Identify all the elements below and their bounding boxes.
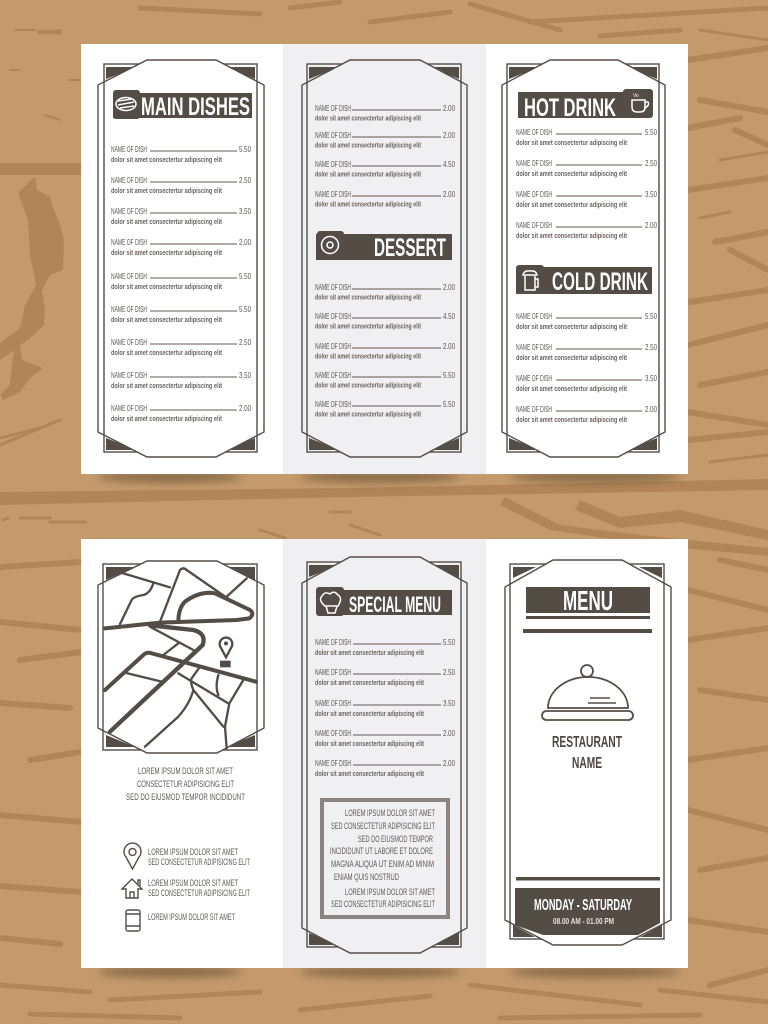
panel: bottom brochure sheet xyxy=(81,539,688,968)
menu items: special menu: NAME OF DISH xyxy=(315,698,351,708)
menu items: top of dessert panel: 2.00 xyxy=(443,189,455,199)
menu items: dessert: NAME OF DISH xyxy=(315,282,351,292)
menu items: cold drink: NAME OF DISH xyxy=(516,311,552,321)
address text: SED DO EIUSMOD TEMPOR INCIDIDUNT xyxy=(126,792,245,802)
menu items: special menu: dolor sit amet consectertur adipiscing elit xyxy=(315,709,424,718)
menu items: main dishes: NAME OF DISH xyxy=(111,144,147,154)
frame: special menu xyxy=(302,557,467,953)
menu items: dessert: dolor sit amet consectertur adipiscing elit xyxy=(315,322,421,330)
menu items: main dishes: dolor sit amet consectertur adipiscing elit xyxy=(111,282,222,291)
icon: steak xyxy=(116,98,136,110)
menu items: main dishes: dolor sit amet consectertur adipiscing elit xyxy=(111,315,222,324)
menu items: special menu: 2.00 xyxy=(443,758,455,768)
menu items: main dishes: dolor sit amet consectertur adipiscing elit xyxy=(111,155,222,164)
icon: location pin xyxy=(124,843,141,869)
menu items: main dishes: 5.50 xyxy=(239,304,251,314)
menu items: dessert: dolor sit amet consectertur adipiscing elit xyxy=(315,380,421,390)
frame: main dishes xyxy=(98,60,264,457)
text box: SED CONSECTETUR ADIPISICING ELIT xyxy=(331,899,435,909)
menu items: hot drink: NAME OF DISH xyxy=(516,220,552,230)
menu items: cold drink: dolor sit amet consectertur adipiscing elit xyxy=(516,384,627,393)
menu items: cold drink: 2.00 xyxy=(645,404,657,414)
menu items: main dishes: NAME OF DISH xyxy=(111,237,147,247)
menu items: dessert: NAME OF DISH xyxy=(315,370,351,380)
menu items: hot drink: dolor sit amet consectertur adipiscing elit xyxy=(516,231,627,240)
icon: phone xyxy=(126,910,140,931)
panel: top brochure sheet xyxy=(81,44,688,474)
menu items: special menu: NAME OF DISH xyxy=(315,758,351,768)
heading: cold drink xyxy=(516,265,652,296)
menu items: cold drink: 5.50 xyxy=(645,311,657,321)
menu items: top of dessert panel: NAME OF DISH xyxy=(315,130,351,140)
opening hours xyxy=(515,888,660,935)
menu items: main dishes: dolor sit amet consectertur adipiscing elit xyxy=(111,217,222,226)
menu items: main dishes: 3.50 xyxy=(239,370,251,380)
menu items: hot drink: dolor sit amet consectertur adipiscing elit xyxy=(516,169,627,178)
menu items: main dishes: dolor sit amet consectertur adipiscing elit xyxy=(111,414,222,423)
menu items: main dishes: NAME OF DISH xyxy=(111,304,147,314)
menu items: special menu: dolor sit amet consectertur adipiscing elit xyxy=(315,739,424,748)
icon: chef hat xyxy=(321,592,340,613)
contact: home: LOREM IPSUM DOLOR SIT AMET xyxy=(148,878,238,888)
menu items: dessert: 5.50 xyxy=(443,399,455,409)
frame: map xyxy=(98,561,264,753)
menu items: special menu: NAME OF DISH xyxy=(315,667,351,677)
heading: dessert: DESSERT xyxy=(374,234,446,262)
menu items: dessert: dolor sit amet consectertur adipiscing elit xyxy=(315,352,421,360)
menu items: main dishes: NAME OF DISH xyxy=(111,337,147,347)
menu items: dessert: dolor sit amet consectertur adipiscing elit xyxy=(315,292,421,302)
menu items: special menu xyxy=(315,637,455,778)
icon: serving cloche xyxy=(542,665,633,720)
heading: cold drink: COLD DRINK xyxy=(552,268,648,296)
menu items: cold drink: NAME OF DISH xyxy=(516,342,552,352)
menu items: main dishes: NAME OF DISH xyxy=(111,403,147,413)
icon: house xyxy=(122,879,142,898)
menu items: top of dessert panel: NAME OF DISH xyxy=(315,103,351,113)
shadows under bottom panel xyxy=(98,966,680,978)
menu items: main dishes: dolor sit amet consectertur adipiscing elit xyxy=(111,348,222,357)
heading: special menu: SPECIAL MENU xyxy=(349,592,441,617)
contact: phone xyxy=(126,910,235,931)
contact: home xyxy=(122,878,250,898)
heading: dessert xyxy=(316,231,452,262)
menu items: main dishes: dolor sit amet consectertur adipiscing elit xyxy=(111,248,222,257)
contact: address: LOREM IPSUM DOLOR SIT AMET xyxy=(148,847,238,857)
menu items: special menu: dolor sit amet consectertur adipiscing elit xyxy=(315,769,424,778)
menu items: top of dessert panel: dolor sit amet consectertur adipiscing elit xyxy=(315,114,421,122)
frame: drinks xyxy=(502,60,665,457)
menu items: cold drink: dolor sit amet consectertur adipiscing elit xyxy=(516,322,627,331)
menu items: cold drink: NAME OF DISH xyxy=(516,373,552,383)
menu items: main dishes: 2.00 xyxy=(239,237,251,247)
menu items: special menu: dolor sit amet consectertur adipiscing elit xyxy=(315,648,424,657)
restaurant name: NAME xyxy=(572,755,602,772)
menu items: special menu: 3.50 xyxy=(443,698,455,708)
panel: dessert xyxy=(302,60,467,457)
menu items: special menu: 2.00 xyxy=(443,728,455,738)
address text: CONSECTETUR ADIPISICING ELIT xyxy=(137,779,234,789)
text box: LOREM IPSUM DOLOR SIT AMET xyxy=(345,808,435,818)
contact: home: SED CONSECTETUR ADIPISICING ELIT xyxy=(148,888,250,898)
heading: main dishes: MAIN DISHES xyxy=(141,93,250,121)
contact: address xyxy=(124,843,250,869)
menu items: top of dessert panel: 4.50 xyxy=(443,159,455,169)
text box: INCIDIDUNT UT LABORE ET DOLORE xyxy=(330,846,433,856)
panel: cover xyxy=(505,560,671,945)
menu items: special menu: 2.50 xyxy=(443,667,455,677)
menu items: main dishes: 2.00 xyxy=(239,403,251,413)
menu items: top of dessert panel: dolor sit amet consectertur adipiscing elit xyxy=(315,140,421,150)
menu items: dessert: NAME OF DISH xyxy=(315,399,351,409)
text box: MAGNA ALIQUA UT ENIM AD MINIM xyxy=(331,859,434,869)
menu items: dessert: NAME OF DISH xyxy=(315,341,351,351)
menu items: hot drink: 5.50 xyxy=(645,127,657,137)
menu items: hot drink: NAME OF DISH xyxy=(516,189,552,199)
icon: beer mug xyxy=(523,271,538,290)
menu items: top of dessert panel: NAME OF DISH xyxy=(315,189,351,199)
menu items: dessert: 5.50 xyxy=(443,370,455,380)
menu items: dessert: 4.50 xyxy=(443,311,455,321)
menu items: cold drink: 2.50 xyxy=(645,342,657,352)
shadows under top panel xyxy=(98,471,680,483)
menu items: top of dessert panel: dolor sit amet consectertur adipiscing elit xyxy=(315,170,421,178)
menu items: main dishes: NAME OF DISH xyxy=(111,206,147,216)
menu items: main dishes: dolor sit amet consectertur adipiscing elit xyxy=(111,186,222,195)
opening hours: 08.00 AM - 01.00 PM xyxy=(553,916,614,926)
menu items: dessert xyxy=(315,282,455,418)
menu items: main dishes xyxy=(111,144,251,423)
frame: dessert xyxy=(302,60,467,457)
menu items: main dishes: NAME OF DISH xyxy=(111,370,147,380)
menu items: cold drink: dolor sit amet consectertur adipiscing elit xyxy=(516,353,627,362)
text box: SED DO EIUSMOD TEMPOR xyxy=(358,834,433,844)
address text: LOREM IPSUM DOLOR SIT AMET xyxy=(138,766,233,776)
icon: donut xyxy=(322,236,338,254)
menu items: main dishes: 5.50 xyxy=(239,271,251,281)
text box: ENIAM QUIS NOSTRUD xyxy=(334,872,399,882)
text box: LOREM IPSUM DOLOR SIT AMET xyxy=(345,887,435,897)
menu items: hot drink: 3.50 xyxy=(645,189,657,199)
text box xyxy=(322,800,448,917)
menu items: cold drink: 3.50 xyxy=(645,373,657,383)
frame: cover xyxy=(505,560,671,945)
menu items: cold drink: dolor sit amet consectertur adipiscing elit xyxy=(516,415,627,424)
menu items: top of dessert panel: 2.00 xyxy=(443,103,455,113)
map xyxy=(105,568,256,748)
menu items: hot drink: NAME OF DISH xyxy=(516,127,552,137)
menu items: main dishes: 5.50 xyxy=(239,144,251,154)
menu items: special menu: 5.50 xyxy=(443,637,455,647)
panel: main dishes xyxy=(98,60,264,457)
contact: phone: LOREM IPSUM DOLOR SIT AMET xyxy=(148,912,235,922)
menu items: dessert: 2.00 xyxy=(443,341,455,351)
menu items: hot drink: dolor sit amet consectertur adipiscing elit xyxy=(516,138,627,147)
icon: map pin xyxy=(220,638,232,667)
panel: special menu xyxy=(302,557,467,953)
heading: hot drink: HOT DRINK xyxy=(524,94,616,122)
address text xyxy=(126,766,245,802)
menu items: dessert: 2.00 xyxy=(443,282,455,292)
rule above hours xyxy=(516,877,660,880)
text box: SED CONSECTETUR ADIPISICING ELIT xyxy=(331,821,435,831)
menu items: cold drink: NAME OF DISH xyxy=(516,404,552,414)
menu items: top of dessert panel: NAME OF DISH xyxy=(315,159,351,169)
heading: special menu xyxy=(316,587,452,617)
panel: location xyxy=(98,561,264,931)
menu items: special menu: NAME OF DISH xyxy=(315,637,351,647)
opening hours: MONDAY - SATURDAY xyxy=(534,897,632,914)
menu items: dessert: dolor sit amet consectertur adipiscing elit xyxy=(315,410,421,418)
menu items: main dishes: 2.50 xyxy=(239,175,251,185)
menu items: top of dessert panel: 2.00 xyxy=(443,130,455,140)
menu items: hot drink xyxy=(516,127,657,240)
icon: coffee cup: Vo xyxy=(633,93,639,99)
menu items: main dishes: NAME OF DISH xyxy=(111,271,147,281)
menu items: top of dessert panel xyxy=(315,103,455,208)
menu items: main dishes: NAME OF DISH xyxy=(111,175,147,185)
menu items: special menu: NAME OF DISH xyxy=(315,728,351,738)
menu items: special menu: dolor sit amet consectertur adipiscing elit xyxy=(315,678,424,687)
menu items: hot drink: 2.50 xyxy=(645,158,657,168)
menu items: main dishes: dolor sit amet consectertur adipiscing elit xyxy=(111,381,222,390)
contact: address: SED CONSECTETUR ADIPISICING ELIT xyxy=(148,857,250,867)
heading: main dishes xyxy=(113,90,252,121)
title: menu: MENU xyxy=(563,585,613,616)
menu items: hot drink: NAME OF DISH xyxy=(516,158,552,168)
title: menu xyxy=(526,585,650,616)
menu items: dessert: NAME OF DISH xyxy=(315,311,351,321)
restaurant name: RESTAURANT xyxy=(552,734,622,751)
menu items: top of dessert panel: dolor sit amet consectertur adipiscing elit xyxy=(315,200,421,208)
menu items: main dishes: 3.50 xyxy=(239,206,251,216)
panel: drinks xyxy=(502,60,665,457)
restaurant name xyxy=(552,734,622,772)
menu items: cold drink xyxy=(516,311,657,424)
menu items: main dishes: 2.50 xyxy=(239,337,251,347)
menu items: hot drink: dolor sit amet consectertur adipiscing elit xyxy=(516,200,627,209)
menu items: hot drink: 2.00 xyxy=(645,220,657,230)
title rules xyxy=(523,616,652,633)
